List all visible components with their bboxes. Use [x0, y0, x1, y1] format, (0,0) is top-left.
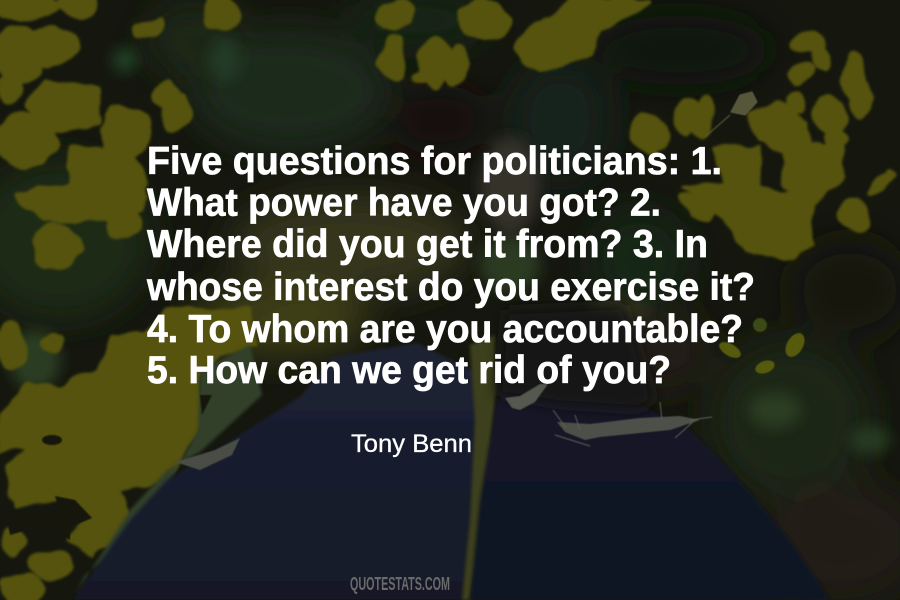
quote text: 4. To whom are you accountable?: [147, 308, 743, 351]
seed pod: [705, 92, 757, 137]
strip between legs: [462, 335, 495, 600]
quote text: [146, 140, 755, 392]
watermark: QUOTESTATS.COM: [350, 574, 450, 594]
shadow at top of right leg: [497, 305, 655, 410]
torn denim patches: [175, 384, 712, 470]
quote text: Five questions for politicians: 1.: [147, 140, 722, 183]
green strip along the jeans: [75, 345, 262, 595]
left jeans leg: [73, 343, 495, 600]
dark gaps between bottom-left flowers: [5, 395, 212, 540]
bottom-left mass: [0, 322, 24, 368]
author name: Tony Benn: [351, 430, 472, 458]
quote text: 5. How can we get rid of you?: [147, 349, 671, 392]
quote text: What power have you got? 2.: [147, 182, 661, 224]
small flowers right of quote: [717, 318, 808, 376]
right jeans leg: [470, 390, 830, 600]
quote text: Where did you get it from? 3. In: [147, 223, 708, 266]
quote text: whose interest do you exercise it?: [146, 266, 755, 309]
